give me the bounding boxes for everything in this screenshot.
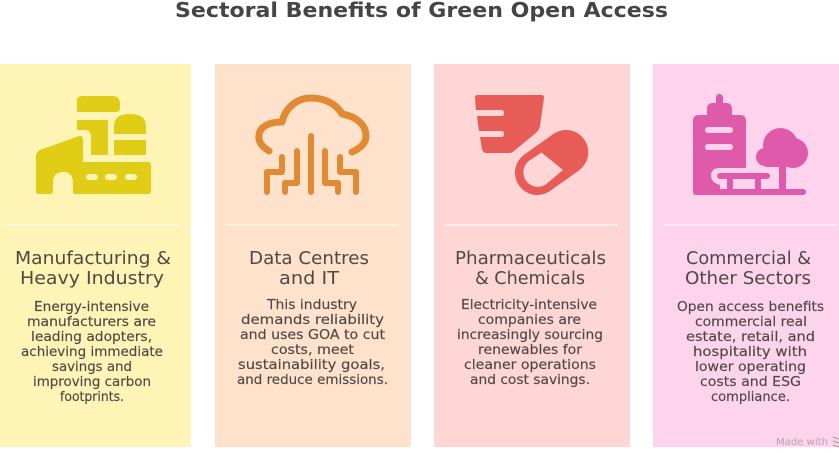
heading: data centres: and IT (279, 269, 339, 289)
text: manufacturing (21, 300, 163, 405)
text: data centres: demands reliability (241, 313, 384, 328)
text: commercial: hospitality with (693, 345, 807, 360)
heading: commercial: Commercial & (686, 249, 811, 269)
text: manufacturing: footprints. (60, 390, 124, 405)
text: pharmaceuticals: companies are (478, 313, 581, 328)
text: data centres: and uses GOA to cut (240, 328, 385, 343)
heading: pharmaceuticals: & Chemicals (475, 269, 585, 289)
text: data centres (237, 298, 388, 388)
text: commercial: estate, retail, and (686, 330, 815, 345)
text: manufacturing: manufacturers are (27, 315, 156, 330)
text: manufacturing: Energy-intensive (34, 300, 149, 315)
text: pharmaceuticals: increasingly sourcing (457, 328, 603, 343)
heading: commercial (685, 249, 811, 289)
text: commercial: lower operating (695, 360, 806, 375)
text: pharmaceuticals: cleaner operations (464, 358, 596, 373)
text: manufacturing: improving carbon (33, 375, 151, 390)
panel: data centres (215, 64, 411, 447)
heading: commercial: Other Sectors (685, 269, 811, 289)
panel: pharmaceuticals (434, 64, 630, 447)
heading: data centres (249, 249, 369, 289)
heading: pharmaceuticals (455, 249, 606, 289)
text: pharmaceuticals: and cost savings. (470, 373, 590, 388)
watermark: Made with (776, 437, 828, 448)
text: manufacturing: leading adopters, (31, 330, 152, 345)
text: data centres: This industry (266, 298, 357, 313)
panel: manufacturing (0, 64, 191, 447)
text: manufacturing: achieving immediate (21, 345, 163, 360)
icon: building and tree (693, 94, 808, 195)
text: commercial: commercial real (695, 315, 807, 330)
text: manufacturing: savings and (52, 360, 132, 375)
text: pharmaceuticals: renewables for (478, 343, 583, 358)
text: data centres: costs, meet (271, 343, 354, 358)
text: commercial (677, 300, 824, 405)
heading: manufacturing (15, 249, 171, 289)
icon: beaker and capsule (475, 95, 566, 187)
text: commercial: compliance. (711, 390, 790, 405)
text: commercial: Open access benefits (677, 300, 824, 315)
icon: cloud with circuits (259, 98, 366, 192)
text: data centres: sustainability goals, (238, 358, 385, 373)
heading: data centres: Data Centres (249, 249, 369, 269)
text: pharmaceuticals (457, 298, 603, 388)
heading: manufacturing: Manufacturing & (15, 249, 171, 269)
icon: factory (36, 96, 151, 194)
text: data centres: and reduce emissions. (237, 373, 388, 388)
heading: pharmaceuticals: Pharmaceuticals (455, 249, 606, 269)
panel: commercial (653, 64, 839, 447)
text: commercial: costs and ESG (700, 375, 801, 390)
heading: manufacturing: Heavy Industry (20, 269, 164, 289)
text: pharmaceuticals: Electricity-intensive (461, 298, 597, 313)
